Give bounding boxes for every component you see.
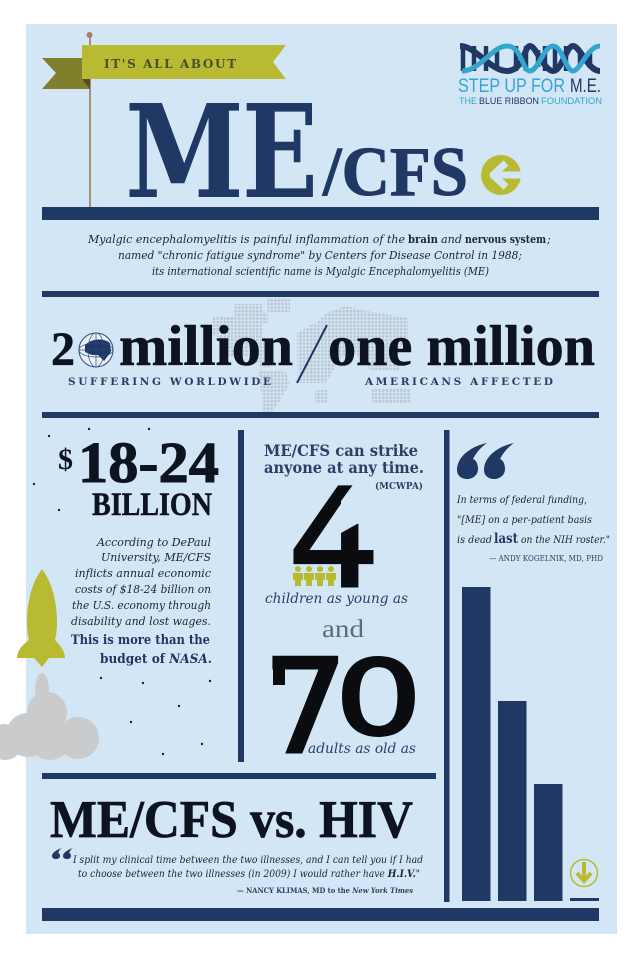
title: M (125, 77, 244, 228)
title (125, 77, 468, 228)
pull quote: Nancy Klimas: to choose between the two illnesses (in 2009) I would rather have H.I.V." (78, 869, 420, 880)
logo: Step Up for M.E.: BLUE RIBBON (479, 96, 539, 106)
panel: age range: children as young as (265, 591, 408, 607)
title: E (242, 77, 318, 228)
intro text: nervous system (465, 233, 546, 246)
stat: one million Americans: AMERICANS AFFECTED (364, 376, 553, 388)
panel: age range: (MCWPA) (375, 481, 423, 492)
panel: economic cost (58, 430, 219, 667)
icon: four children (293, 566, 336, 586)
panel: age range: adults as old as (308, 741, 416, 757)
bar chart: funding (462, 587, 599, 901)
intro text: brain (408, 233, 438, 246)
header rule (42, 207, 599, 220)
stat: 20 million worldwide: 2 (51, 323, 75, 376)
pull quote: Nancy Klimas: — NANCY KLIMAS, MD to the New York Times (237, 886, 414, 895)
icon: rocket (17, 569, 65, 667)
stat: one million Americans: one million (328, 315, 595, 378)
logo: Step Up for M.E.: FOUNDATION (541, 96, 602, 106)
intro text: named "chronic fatigue syndrome" by Centers for Disease Control in 1988; (118, 249, 522, 262)
heading: ME/CFS vs. HIV: ME/CFS vs. HIV (50, 791, 413, 849)
rule (42, 412, 599, 418)
logo: Step Up for M.E.: THE (459, 96, 477, 106)
icon: large quote mark (457, 443, 514, 479)
number 4: 4 (288, 461, 380, 619)
slash divider (297, 325, 327, 383)
body text: costs of $18-24 billion on (75, 582, 211, 596)
panel: age range: anyone at any time. (264, 458, 424, 477)
icon: globe (79, 333, 113, 367)
number 70: 7 (263, 631, 348, 783)
number 70: 0 (335, 639, 422, 759)
panel: age range: and (322, 616, 365, 643)
intro text: its international scientific name is Myalgic Encephalomyelitis (ME) (152, 265, 489, 278)
footer rule (42, 908, 599, 921)
panel: age range: ME/CFS can strike (264, 441, 418, 460)
panel: economic cost: budget of NASA. (100, 652, 212, 667)
pull quote: Nancy Klimas (72, 855, 423, 895)
column divider (444, 430, 450, 902)
logo: Step Up for M.E. (458, 46, 602, 106)
flag banner (42, 32, 286, 207)
body text: inflicts annual economic (75, 566, 212, 580)
body text: disability and lost wages. (71, 614, 211, 628)
intro text: Myalgic encephalomyelitis is painful inflammation of the (87, 233, 405, 246)
intro text: ; (546, 233, 551, 246)
dotted world map (212, 298, 411, 412)
column divider (238, 430, 244, 762)
pull quote: federal funding: on the NIH roster." (521, 535, 610, 546)
title: /CFS (322, 134, 468, 211)
stat: 20 million worldwide: SUFFERING WORLDWIDE (68, 376, 271, 388)
pull quote: federal funding: last (494, 531, 518, 547)
stars (33, 428, 211, 755)
logo: Step Up for M.E.: M.E. (570, 76, 601, 97)
logo: Step Up for M.E.: STEP UP FOR (458, 76, 565, 97)
pull quote: federal funding (456, 495, 610, 563)
body text: the U.S. economy through (72, 598, 211, 612)
rule (42, 773, 436, 779)
pull quote: federal funding: — ANDY KOGELNIK, MD, PHD (489, 554, 603, 563)
flag banner: IT'S ALL ABOUT (104, 57, 236, 71)
rule (42, 291, 599, 297)
icon: smoke cloud (0, 673, 99, 760)
stat: 20 million worldwide (51, 315, 293, 388)
body text: University, ME/CFS (101, 550, 211, 564)
icon: arrow in circle (481, 155, 523, 195)
pull quote: federal funding: "[ME] on a per-patient basis (457, 515, 592, 526)
panel: economic cost: This is more than the (71, 633, 210, 648)
body text: According to DePaul (96, 535, 211, 549)
pull quote: federal funding: is dead (457, 535, 492, 546)
icon: small quote mark (52, 848, 73, 859)
intro text: and (441, 233, 462, 246)
panel: economic cost: BILLION (92, 487, 212, 523)
pull quote: Nancy Klimas: I split my clinical time between the two illnesses, and I can tell you if I had (72, 855, 423, 866)
number 70 (263, 631, 422, 783)
stat: 20 million worldwide: million (119, 315, 293, 378)
panel: economic cost: 18-24 (78, 430, 219, 495)
panel: economic cost: $ (58, 443, 73, 476)
intro text (87, 233, 551, 278)
panel: age range (263, 441, 424, 783)
pull quote: federal funding: In terms of federal funding, (456, 495, 587, 506)
body text (71, 535, 212, 628)
icon: down arrow (570, 860, 598, 886)
